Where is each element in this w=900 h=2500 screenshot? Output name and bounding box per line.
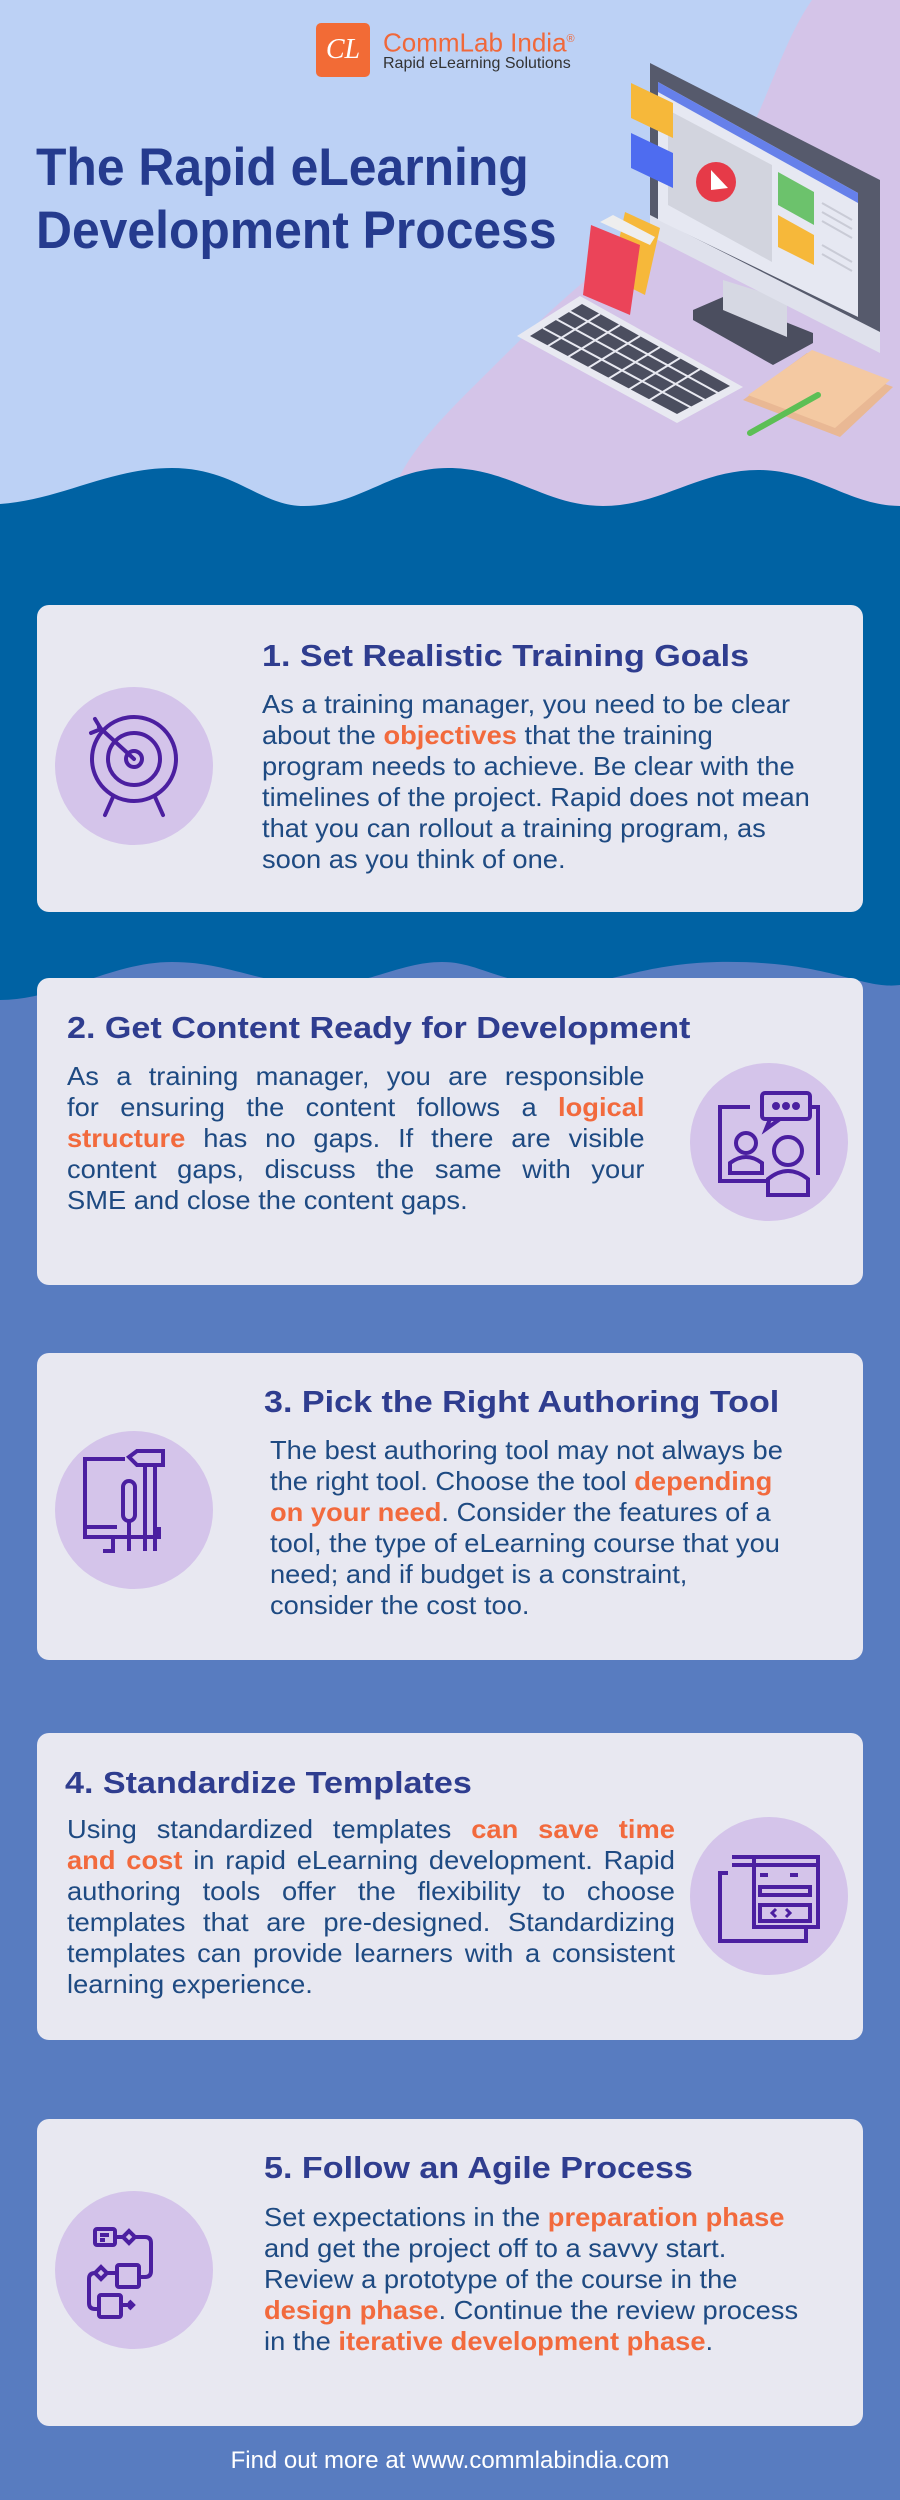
icon: CL logo mark — [316, 23, 370, 77]
text block: and cost in rapid eLearning development. Rapid — [67, 1845, 675, 1875]
text block: design phase. Continue the review process — [264, 2295, 798, 2325]
heading: 3. Pick the Right Authoring Tool — [264, 1384, 779, 1419]
text block: tool, the type of eLearning course that you — [270, 1528, 780, 1558]
text block: As a training manager, you need to be clear — [262, 689, 790, 719]
text block: learning experience. — [67, 1969, 313, 1999]
text block — [262, 689, 810, 874]
text block: for ensuring the content follows a logical — [67, 1092, 644, 1122]
text block: need; and if budget is a constraint, — [270, 1559, 687, 1589]
panel: step 2 — [37, 978, 863, 1285]
text block: in the iterative development phase. — [264, 2326, 713, 2356]
text block: program needs to achieve. Be clear with the — [262, 751, 795, 781]
keyboard — [517, 296, 743, 423]
heading: 4. Standardize Templates — [65, 1765, 472, 1800]
text block: Using standardized templates can save time — [67, 1814, 675, 1844]
footer: Find out more at www.commlabindia.com — [231, 2447, 669, 2474]
icon: video chat — [690, 1063, 848, 1221]
text block: structure has no gaps. If there are visible — [67, 1123, 645, 1153]
text block: Set expectations in the preparation phase — [264, 2202, 784, 2232]
icon: agile flowchart — [55, 2191, 213, 2349]
text block — [67, 1061, 645, 1215]
icon: tools and monitor — [55, 1431, 213, 1589]
text block: soon as you think of one. — [262, 844, 566, 874]
logo — [316, 23, 575, 77]
monitor stand — [693, 297, 813, 365]
text block — [270, 1435, 783, 1620]
title: The Rapid eLearning — [36, 138, 529, 197]
heading: 5. Follow an Agile Process — [264, 2150, 693, 2185]
papers — [743, 353, 893, 437]
text block — [264, 2202, 798, 2356]
text block: Review a prototype of the course in the — [264, 2264, 737, 2294]
text block — [67, 1814, 675, 1999]
icon: CL logo mark: CL — [326, 34, 360, 65]
text block: SME and close the content gaps. — [67, 1185, 468, 1215]
text block: The best authoring tool may not always be — [270, 1435, 783, 1465]
text block: that you can rollout a training program, as — [262, 813, 766, 843]
text block: and get the project off to a savvy start. — [264, 2233, 726, 2263]
panel: step 3 — [37, 1353, 863, 1660]
panel: step 4 — [37, 1733, 863, 2040]
text block: templates that are pre-designed. Standardizing — [67, 1907, 675, 1937]
logo text: CommLab India® — [383, 28, 575, 58]
text block: consider the cost too. — [270, 1590, 529, 1620]
panel: step 1 — [37, 605, 863, 912]
text block: authoring tools offer the flexibility to choose — [67, 1876, 675, 1906]
text block: on your need. Consider the features of a — [270, 1497, 771, 1527]
text block: the right tool. Choose the tool depending — [270, 1466, 772, 1496]
panel: step 5 — [37, 2119, 863, 2426]
text block: As a training manager, you are responsible — [67, 1061, 644, 1091]
title: Development Process — [36, 201, 557, 260]
text block: content gaps, discuss the same with your — [67, 1154, 644, 1184]
heading: 2. Get Content Ready for Development — [67, 1010, 690, 1045]
icon: target — [55, 687, 213, 845]
illustration: computer desk — [517, 63, 893, 437]
icon: template — [690, 1817, 848, 1975]
logo: Rapid eLearning Solutions — [383, 55, 571, 72]
heading: 1. Set Realistic Training Goals — [262, 638, 749, 673]
monitor — [650, 213, 880, 353]
title — [36, 138, 557, 260]
books — [611, 212, 660, 295]
text block: about the objectives that the training — [262, 720, 713, 750]
text block: timelines of the project. Rapid does not mean — [262, 782, 810, 812]
text block: templates can provide learners with a consistent — [67, 1938, 675, 1968]
header background — [0, 0, 900, 1000]
sticky notes — [631, 83, 673, 138]
